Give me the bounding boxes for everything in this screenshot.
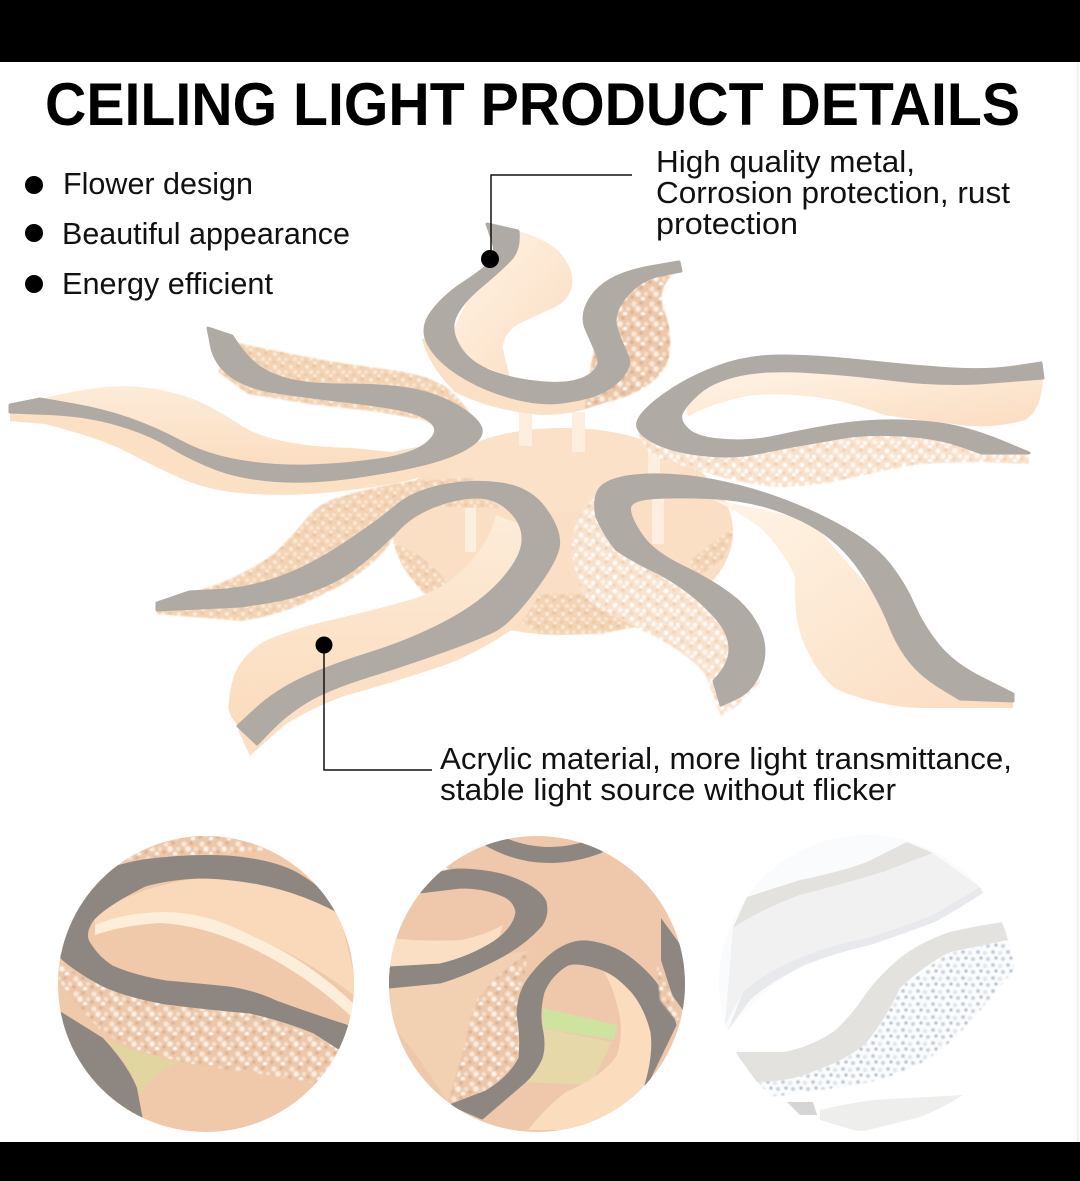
- callout dot: [316, 636, 332, 654]
- lamp base: [393, 412, 733, 635]
- feature list: [25, 166, 350, 301]
- petal: top: [422, 224, 681, 415]
- top black bar: [0, 0, 1080, 62]
- petal: upper left: [10, 328, 482, 495]
- title: CEILING LIGHT PRODUCT DETAILS: [45, 71, 1020, 138]
- text: energy efficient: Energy efficient: [62, 266, 273, 301]
- callout text: protection: [656, 206, 798, 241]
- detail circle 2: [389, 836, 690, 1132]
- text: beautiful appearance: Beautiful appearance: [62, 216, 350, 251]
- detail circle 3: [719, 835, 1016, 1132]
- text: flower design: Flower design: [63, 166, 253, 201]
- callout leader line: [491, 175, 632, 259]
- bullet: energy efficient: [25, 275, 43, 293]
- callout text: High quality metal,: [656, 144, 915, 179]
- bottom black bar: [0, 1142, 1080, 1181]
- callout dot: [481, 250, 499, 268]
- callout: metal: [481, 144, 1010, 268]
- callout text: [440, 741, 1012, 807]
- callout text: Corrosion protection, rust: [656, 175, 1010, 210]
- callout: acrylic: [316, 636, 1012, 807]
- detail circle 1: [50, 830, 365, 1132]
- callout text: Acrylic material, more light transmittance,: [440, 741, 1012, 776]
- callout text: [656, 144, 1010, 241]
- petal: lower right: [572, 475, 1013, 716]
- bullet: flower design: [25, 176, 43, 194]
- callout leader line: [324, 645, 432, 770]
- petal: lower left: [157, 478, 559, 756]
- bullet: beautiful appearance: [25, 224, 43, 242]
- ceiling lamp illustration: [10, 224, 1043, 756]
- petal: upper right: [638, 356, 1043, 487]
- callout text: stable light source without flicker: [440, 772, 896, 807]
